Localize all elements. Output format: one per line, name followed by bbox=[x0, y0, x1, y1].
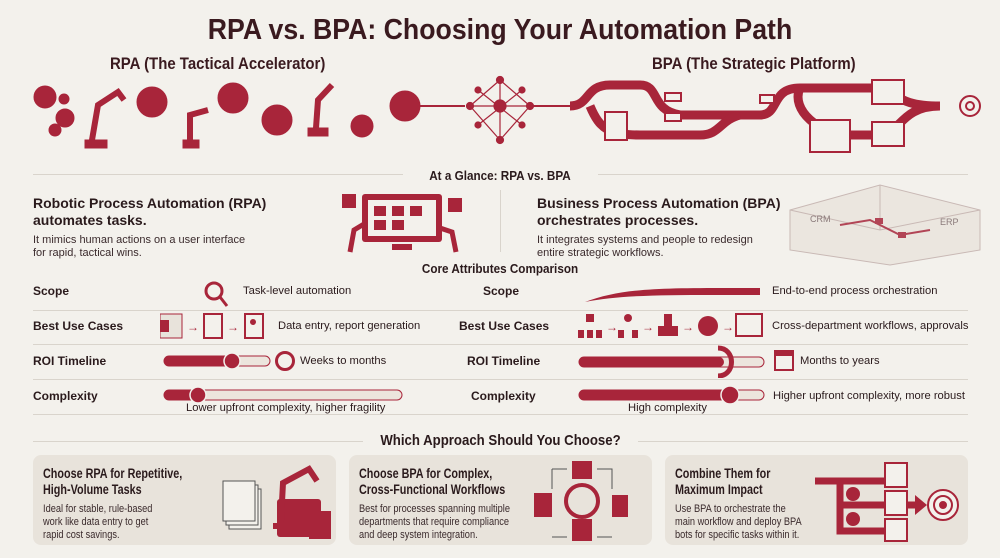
title: RPA vs. BPA: Choosing Your Automation Path bbox=[208, 14, 792, 46]
text block: RPA definition: automates tasks. bbox=[33, 212, 147, 228]
panel: choose BPA: Choose BPA for Complex, bbox=[359, 466, 492, 481]
comparison rows: Complexity bbox=[471, 389, 536, 403]
panel: choose RPA: rapid cost savings. bbox=[43, 529, 120, 541]
comparison rows: → bbox=[722, 320, 734, 334]
icon: workflow with target bbox=[815, 462, 959, 542]
text block: RPA definition bbox=[33, 195, 266, 259]
heading: core attributes: Core Attributes Comparison bbox=[422, 261, 578, 276]
comparison rows bbox=[33, 282, 968, 415]
comparison rows: → bbox=[227, 320, 239, 334]
panel: combine: Maximum Impact bbox=[675, 482, 763, 497]
icon: buildings cycle bbox=[534, 461, 628, 541]
comparison rows: → bbox=[682, 320, 694, 334]
subheading: BPA: BPA (The Strategic Platform) bbox=[652, 54, 856, 73]
comparison rows: Scope bbox=[483, 284, 519, 298]
comparison rows: Months to years bbox=[800, 355, 880, 367]
text block: BPA definition: entire strategic workflows. bbox=[537, 247, 664, 259]
panel: combine: Combine Them for bbox=[675, 466, 770, 481]
panel: choose RPA: Ideal for stable, rule-based bbox=[43, 503, 152, 515]
comparison rows: → bbox=[187, 320, 199, 334]
heading: at a glance: At a Glance: RPA vs. BPA bbox=[429, 168, 571, 183]
panel: combine: bots for specific tasks within it. bbox=[675, 529, 799, 541]
comparison rows: → bbox=[642, 320, 654, 334]
comparison rows: Best Use Cases bbox=[459, 319, 549, 333]
row: scope: Scope bbox=[33, 284, 69, 298]
comparison rows: Lower upfront complexity, higher fragility bbox=[186, 402, 385, 414]
comparison rows: → bbox=[606, 320, 618, 334]
panel: combine: Use BPA to orchestrate the bbox=[675, 503, 786, 515]
illustration: automation path bbox=[34, 76, 981, 153]
text block: RPA definition: It mimics human actions on a user interface bbox=[33, 234, 245, 246]
text block: RPA definition: Robotic Process Automation (RPA) bbox=[33, 195, 266, 211]
text block: BPA definition bbox=[537, 195, 780, 259]
panel: combine: main workflow and deploy BPA bbox=[675, 516, 802, 528]
icon: documents and robot arm bbox=[222, 465, 331, 539]
panel: choose RPA: work like data entry to get bbox=[43, 516, 148, 528]
row: complexity: Complexity bbox=[33, 389, 98, 403]
panel: combine bbox=[665, 455, 968, 545]
comparison rows: End-to-end process orchestration bbox=[772, 285, 937, 297]
row: ROI timeline: ROI Timeline bbox=[33, 354, 106, 368]
comparison rows: Cross-department workflows, approvals bbox=[772, 320, 968, 332]
icon: monitor with robot arms bbox=[342, 194, 462, 252]
panel: choose BPA: Best for processes spanning multiple bbox=[359, 503, 510, 515]
panel: choose BPA: Cross-Functional Workflows bbox=[359, 482, 505, 497]
text block: BPA definition: It integrates systems and people to redesign bbox=[537, 234, 753, 246]
panel: choose RPA: Choose RPA for Repetitive, bbox=[43, 466, 182, 481]
icon: isometric office CRM ERP: ERP bbox=[940, 217, 959, 227]
divider line bbox=[33, 174, 403, 175]
panel: choose RPA bbox=[33, 455, 336, 545]
panel: choose BPA bbox=[349, 455, 652, 545]
comparison rows: Data entry, report generation bbox=[278, 320, 420, 332]
icon: isometric office CRM ERP bbox=[790, 184, 980, 266]
comparison rows: Task-level automation bbox=[243, 285, 351, 297]
comparison rows: High complexity bbox=[628, 402, 707, 414]
heading: which approach: Which Approach Should You Choose? bbox=[380, 432, 621, 449]
text block: BPA definition: Business Process Automation (BPA) bbox=[537, 195, 780, 211]
panel: choose BPA: and deep system integration. bbox=[359, 529, 478, 541]
comparison rows: ROI Timeline bbox=[467, 354, 540, 368]
icon: isometric office CRM ERP: CRM bbox=[810, 214, 830, 224]
comparison rows: Higher upfront complexity, more robust bbox=[773, 390, 965, 402]
text block: RPA definition: for rapid, tactical wins. bbox=[33, 247, 142, 259]
panel: choose RPA: High-Volume Tasks bbox=[43, 482, 142, 497]
comparison rows: Weeks to months bbox=[300, 355, 386, 367]
text block: BPA definition: orchestrates processes. bbox=[537, 212, 698, 228]
panel: choose BPA: departments that require compliance bbox=[359, 516, 509, 528]
row: best use cases: Best Use Cases bbox=[33, 319, 123, 333]
subheading: RPA: RPA (The Tactical Accelerator) bbox=[110, 54, 325, 73]
